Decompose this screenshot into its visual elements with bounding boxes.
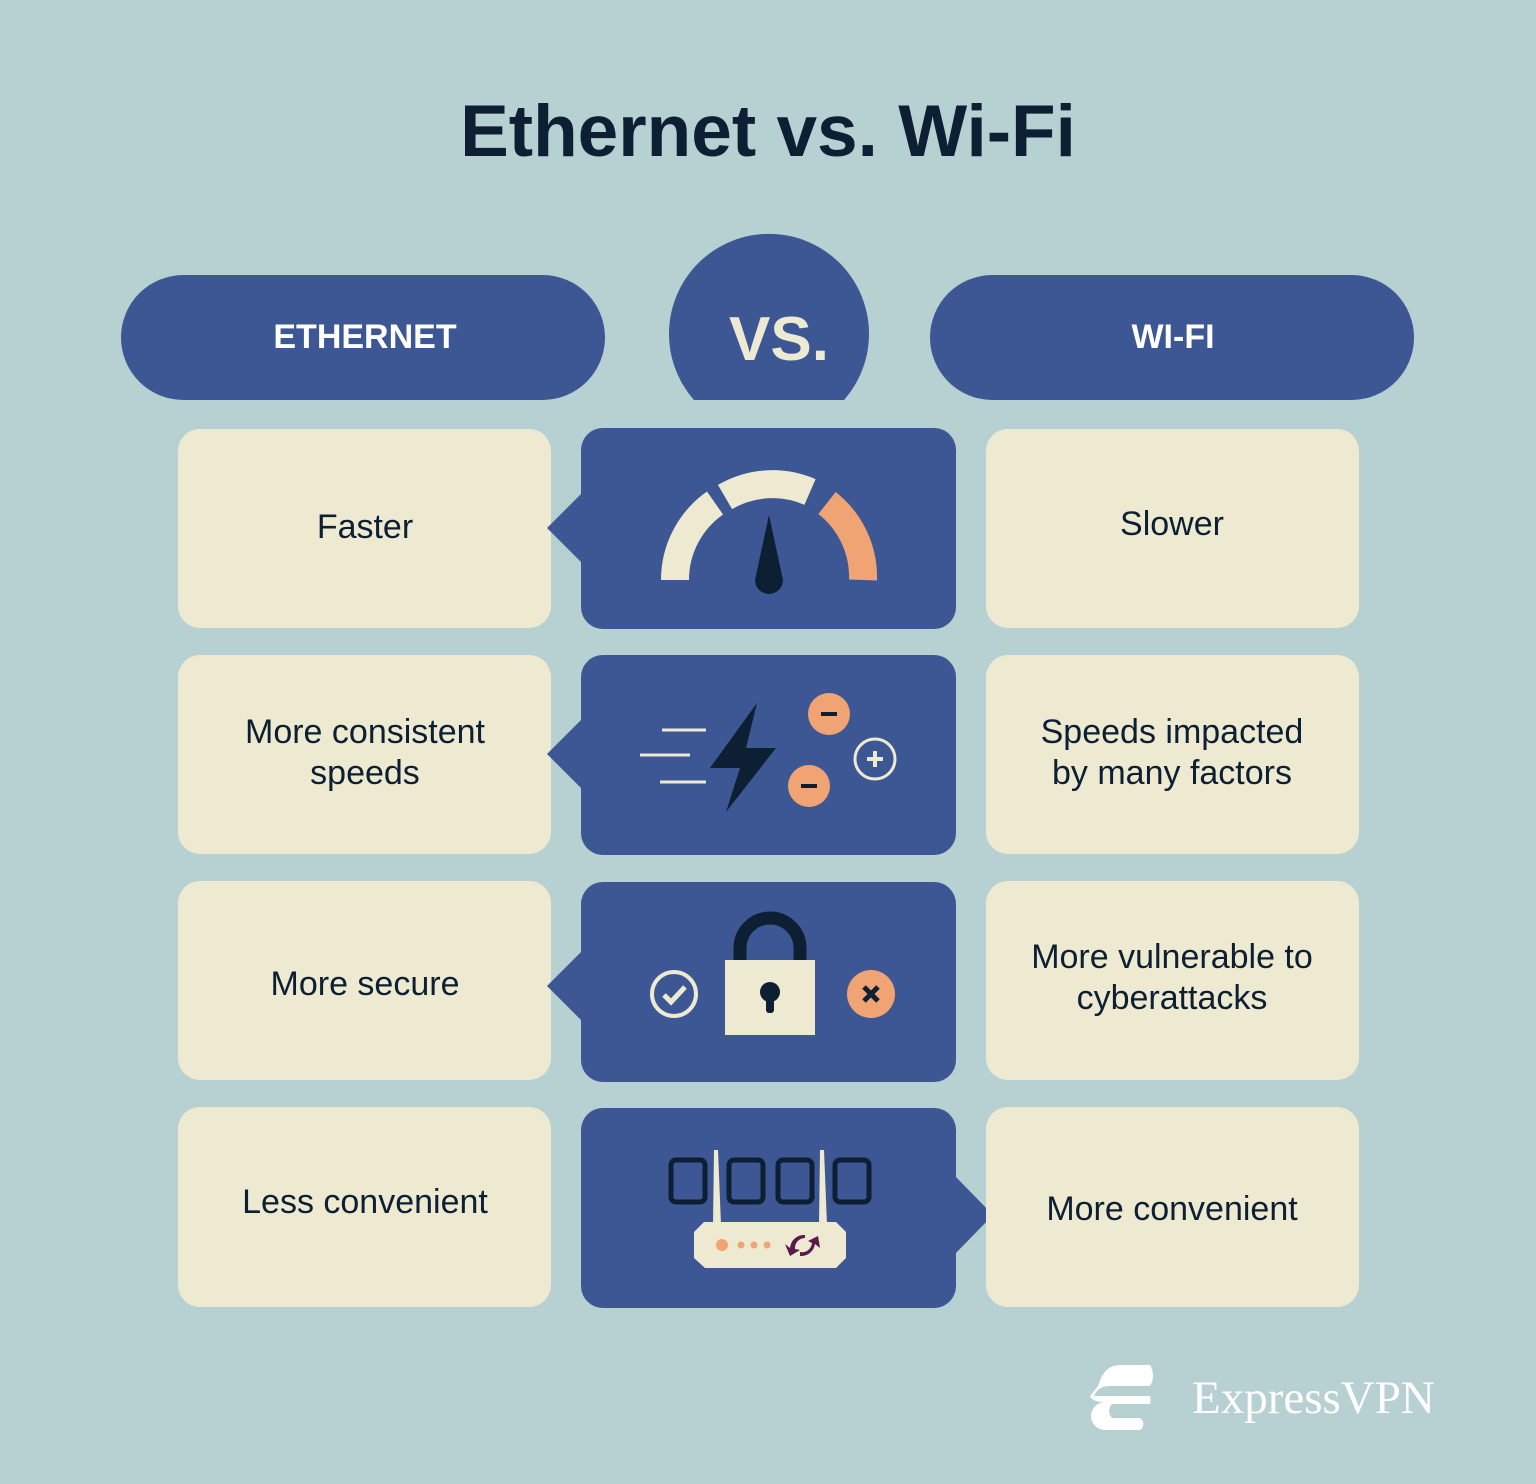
wi-fi: vulnerable: More vulnerable to <box>1031 938 1313 976</box>
icon panel: lock <box>547 882 956 1082</box>
ethernet: secure <box>178 881 551 1080</box>
row 4: convenience <box>178 1107 1359 1308</box>
ethernet: secure: More secure <box>271 965 459 1003</box>
wi-fi: slower: Slower <box>1120 505 1224 543</box>
header: vs circle: VS. <box>729 305 829 374</box>
wi-fi: vulnerable <box>986 881 1359 1080</box>
header: vs circle <box>669 234 869 400</box>
wi-fi: impacted <box>986 655 1359 854</box>
logo: ExpressVPN: ExpressVPN <box>1192 1372 1435 1424</box>
row 3: security <box>178 881 1359 1082</box>
wi-fi: impacted: Speeds impacted <box>1041 713 1303 751</box>
ethernet: faster: Faster <box>317 508 413 546</box>
logo: ExpressVPN <box>1090 1365 1435 1430</box>
wi-fi: more convenient: More convenient <box>1046 1190 1298 1228</box>
wi-fi: slower <box>986 429 1359 628</box>
ethernet: consistent: speeds <box>310 754 420 792</box>
ethernet: consistent <box>178 655 551 854</box>
wi-fi: vulnerable: cyberattacks <box>1077 979 1267 1017</box>
ethernet: consistent: More consistent <box>245 713 486 751</box>
title: Ethernet vs. Wi-Fi <box>460 91 1076 172</box>
header: wi-fi pill <box>930 275 1414 400</box>
icon panel: lightning <box>547 655 956 855</box>
icon panel: speedometer <box>547 428 956 629</box>
wi-fi: impacted: by many factors <box>1052 754 1292 792</box>
header: wi-fi pill: WI-FI <box>1131 318 1215 356</box>
ethernet: faster <box>178 429 551 628</box>
row 1: speed <box>178 428 1359 629</box>
header: ethernet pill <box>121 275 605 400</box>
wi-fi: more convenient <box>986 1107 1359 1307</box>
ethernet: less convenient: Less convenient <box>242 1183 488 1221</box>
ethernet: less convenient <box>178 1107 551 1307</box>
row 2: consistency <box>178 655 1359 855</box>
header: ethernet pill: ETHERNET <box>273 318 457 356</box>
icon panel: router <box>581 1108 993 1308</box>
